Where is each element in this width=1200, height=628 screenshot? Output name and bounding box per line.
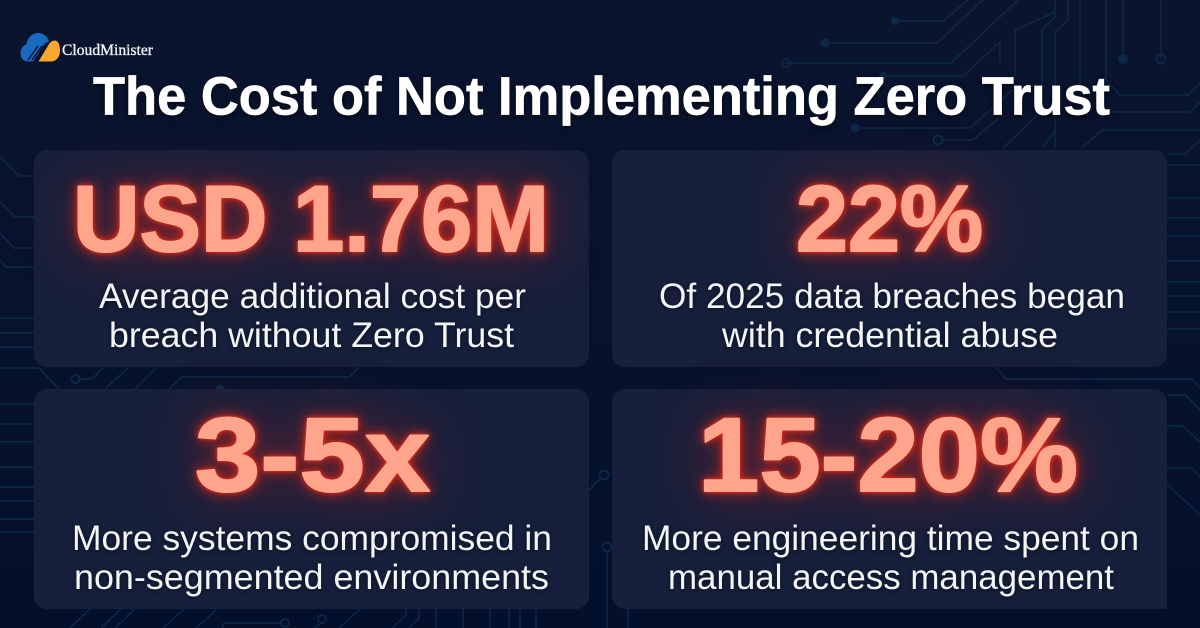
icon: orange cloud bbox=[38, 40, 60, 62]
description: credential abuse: Of 2025 data breaches began bbox=[659, 277, 1125, 316]
description: engineering time: More engineering time spent on bbox=[642, 519, 1139, 558]
panel: credential abuse bbox=[612, 150, 1167, 367]
stat: 22%: 22% bbox=[796, 166, 983, 271]
panel: engineering time bbox=[612, 389, 1167, 609]
description: systems compromised: non-segmented environments bbox=[74, 558, 549, 597]
panel: systems compromised bbox=[34, 389, 589, 609]
stat: USD 1.76M: USD 1.76M bbox=[73, 166, 549, 271]
stat: 15-20%: 15-20% bbox=[698, 397, 1078, 514]
panel: average additional cost bbox=[34, 150, 589, 367]
icon: blue cloud bbox=[20, 33, 49, 62]
description: engineering time: manual access management bbox=[668, 558, 1114, 597]
logo wordmark: CloudMinister bbox=[62, 42, 154, 59]
description: systems compromised: More systems compromised in bbox=[72, 519, 552, 558]
stat: 3-5x: 3-5x bbox=[195, 397, 430, 514]
title: The Cost of Not Implementing Zero Trust bbox=[93, 66, 1110, 126]
description: credential abuse: with credential abuse bbox=[721, 316, 1058, 355]
description: additional cost: breach without Zero Trust bbox=[109, 316, 514, 355]
description: additional cost: Average additional cost per bbox=[99, 277, 526, 316]
logo: CloudMinister bbox=[20, 33, 154, 62]
